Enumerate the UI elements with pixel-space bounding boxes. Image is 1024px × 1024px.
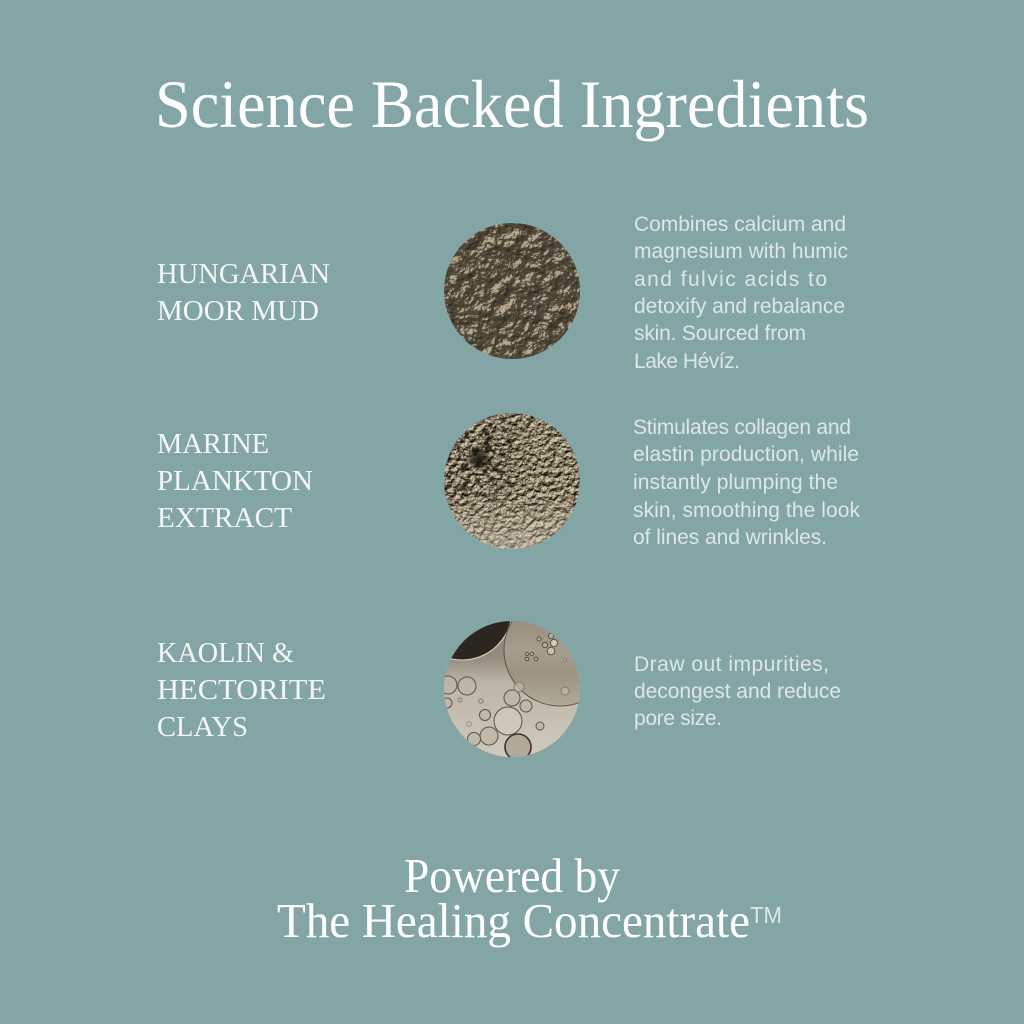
description: Marine plankton extract: [633, 416, 860, 549]
description: Kaolin and hectorite clays: Draw out impurities,: [634, 653, 829, 676]
panel: Marine plankton extract: [157, 413, 860, 549]
title: Science Backed Ingredients: [155, 66, 869, 142]
description: Kaolin and hectorite clays: [634, 653, 841, 730]
image: clay oil bubbles: [444, 621, 580, 757]
description: Hungarian moor mud: Lake Hévíz.: [634, 350, 740, 373]
description: Hungarian moor mud: skin. Sourced from: [634, 322, 806, 345]
footer: powered by The Healing Concentrate: TM: [750, 902, 782, 928]
ingredient name: Kaolin and hectorite clays: HECTORITE: [157, 674, 326, 706]
image: marine plankton texture: [444, 413, 580, 549]
ingredient name: Marine plankton extract: MARINE: [157, 428, 269, 460]
description: Hungarian moor mud: detoxify and rebalance: [634, 295, 845, 318]
description: Marine plankton extract: elastin production, while: [633, 443, 859, 466]
footer: powered by The Healing Concentrate: [277, 848, 782, 948]
footer: powered by The Healing Concentrate: Powered by: [404, 848, 620, 903]
ingredient name: Marine plankton extract: PLANKTON: [157, 465, 313, 497]
ingredient name: Kaolin and hectorite clays: CLAYS: [157, 711, 248, 743]
ingredient name: Kaolin and hectorite clays: [157, 637, 326, 743]
description: Hungarian moor mud: [634, 213, 848, 373]
description: Marine plankton extract: of lines and wrinkles.: [633, 526, 827, 549]
ingredient name: Marine plankton extract: [157, 428, 313, 534]
ingredient name: Hungarian moor mud: MOOR MUD: [157, 295, 319, 327]
description: Marine plankton extract: skin, smoothing the look: [633, 499, 860, 522]
description: Marine plankton extract: Stimulates collagen and: [633, 416, 851, 439]
ingredient name: Kaolin and hectorite clays: KAOLIN &: [157, 637, 294, 669]
description: Kaolin and hectorite clays: decongest and reduce: [634, 680, 841, 703]
ingredient name: Hungarian moor mud: [157, 258, 330, 327]
image: moor mud texture: [444, 223, 580, 359]
description: Marine plankton extract: instantly plumping the: [633, 471, 838, 494]
ingredient name: Hungarian moor mud: HUNGARIAN: [157, 258, 330, 290]
description: Hungarian moor mud: magnesium with humic: [634, 240, 848, 263]
description: Kaolin and hectorite clays: pore size.: [634, 707, 722, 730]
ingredient name: Marine plankton extract: EXTRACT: [157, 502, 292, 534]
description: Hungarian moor mud: and fulvic acids to: [634, 268, 827, 291]
panel: Kaolin and hectorite clays: [158, 621, 840, 757]
footer: powered by The Healing Concentrate: The Healing Concentrate: [277, 893, 750, 948]
panel: Hungarian moor mud: [157, 213, 848, 373]
description: Hungarian moor mud: Combines calcium and: [634, 213, 846, 236]
